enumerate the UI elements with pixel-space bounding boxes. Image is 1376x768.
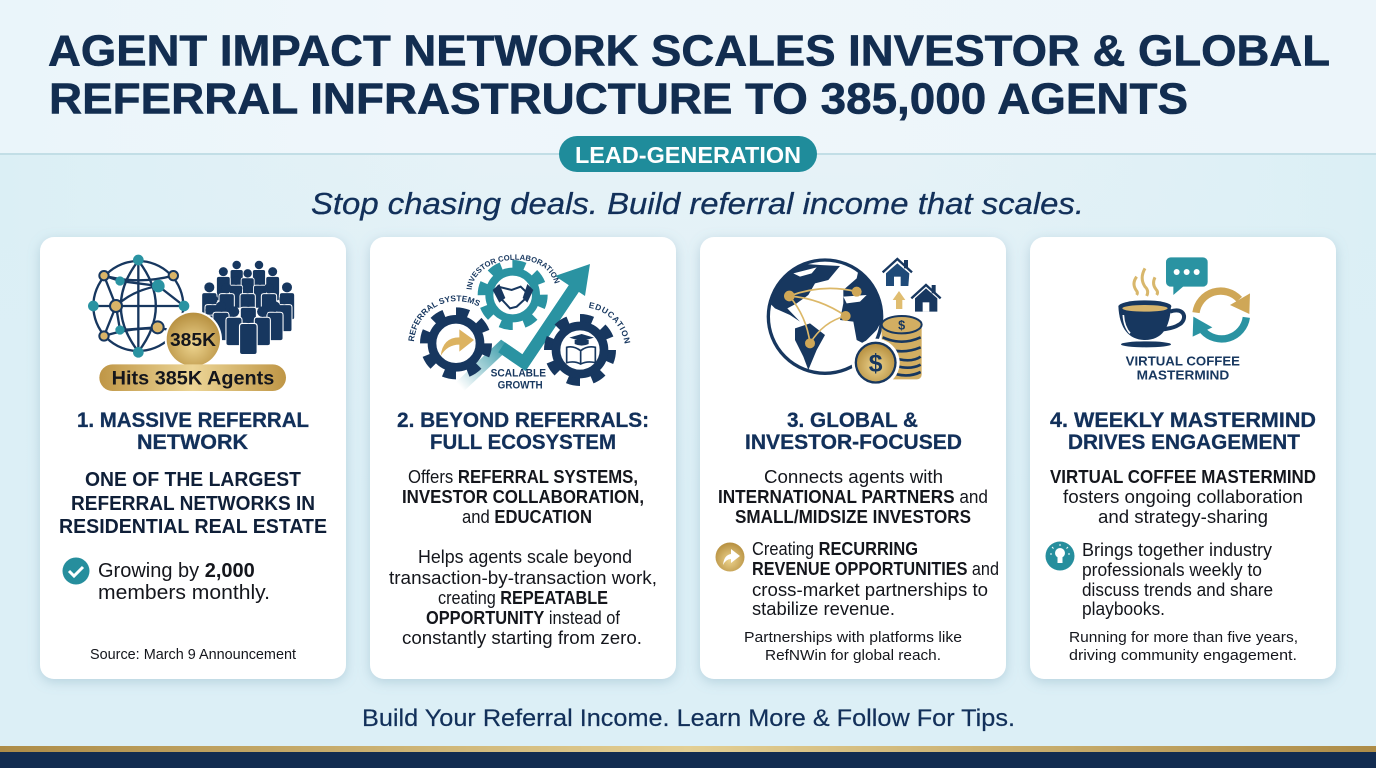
subheading: ONE OF THE LARGEST — [85, 468, 301, 491]
label: scalable growth: GROWTH — [498, 379, 543, 391]
icon: steam — [1134, 268, 1158, 296]
icon: crowd of people — [202, 261, 295, 355]
heading: INVESTOR-FOCUSED — [745, 430, 962, 454]
icon: gears and growth arrow — [408, 254, 630, 391]
label: virtual coffee mastermind: VIRTUAL COFFEE — [1126, 353, 1240, 368]
icon: navy gear with book — [548, 318, 612, 382]
note: Partnerships with platforms like — [744, 630, 962, 646]
summary text — [718, 466, 988, 527]
icon: teal gear — [482, 264, 543, 326]
bullet text: Growing by 2,000 — [98, 560, 255, 582]
note: Running for more than five years, — [1069, 630, 1298, 646]
label: scalable growth: SCALABLE — [491, 368, 546, 380]
heading — [397, 408, 649, 454]
icon: dollar coin: $ — [869, 350, 883, 377]
icon: cup — [1118, 300, 1184, 347]
bullet text: Brings together industry — [1082, 539, 1273, 560]
heading: 3. GLOBAL & — [787, 408, 918, 432]
bullet text: stabilize revenue. — [752, 598, 895, 619]
subheading: REFERRAL NETWORKS IN — [71, 492, 315, 515]
body text: constantly starting from zero. — [402, 627, 642, 648]
label: virtual coffee mastermind — [1126, 353, 1240, 382]
label: virtual coffee mastermind: MASTERMIND — [1137, 367, 1230, 382]
summary text: and EDUCATION — [462, 506, 592, 527]
badge: 385K: 385K — [170, 329, 217, 350]
icon: lightbulb — [1046, 542, 1074, 570]
arrow: growth — [460, 264, 590, 387]
title: REFERRAL INFRASTRUCTURE TO 385,000 AGENTS — [49, 74, 1188, 124]
footer bar — [0, 746, 1376, 768]
icon: navy gear with referral arrow — [424, 312, 488, 375]
summary text — [1050, 466, 1316, 527]
heading — [745, 408, 962, 454]
body text: Helps agents scale beyond — [418, 546, 632, 567]
bullet text: cross-market partnerships to — [752, 579, 988, 600]
heading: FULL ECOSYSTEM — [430, 430, 616, 454]
heading: 4. WEEKLY MASTERMIND — [1050, 408, 1316, 432]
heading: 2. BEYOND REFERRALS: — [397, 408, 649, 432]
body text — [389, 546, 657, 648]
subheading — [59, 468, 327, 538]
bullet text — [752, 538, 999, 619]
bullet text: playbooks. — [1082, 598, 1165, 619]
icon: coffee cup, chat and cycle — [1118, 257, 1250, 382]
icon: cycle arrows — [1193, 291, 1250, 339]
icon: check — [62, 558, 90, 584]
bullet text: REVENUE OPPORTUNITIES and — [752, 558, 999, 579]
note: driving community engagement. — [1069, 648, 1297, 664]
badge: lead-generation: LEAD-GENERATION — [575, 142, 801, 168]
title: AGENT IMPACT NETWORK SCALES INVESTOR & GLOBAL — [48, 26, 1330, 76]
footer call to action: Build Your Referral Income. Learn More & Follow For Tips. — [362, 705, 1015, 732]
summary text: INVESTOR COLLABORATION, — [402, 486, 644, 507]
panel: beyond referrals — [365, 235, 681, 686]
icon: coin stack: $ — [898, 318, 905, 332]
icon: coin stack — [882, 316, 922, 379]
heading: NETWORK — [137, 430, 248, 454]
summary text: SMALL/MIDSIZE INVESTORS — [735, 506, 971, 527]
label: investor collaboration: INVESTOR COLLABORATION — [466, 254, 560, 290]
background — [0, 155, 1376, 768]
label: scalable growth — [491, 368, 546, 391]
subheading: RESIDENTIAL REAL ESTATE — [59, 515, 327, 538]
summary text: VIRTUAL COFFEE MASTERMIND — [1050, 466, 1316, 487]
heading — [1050, 408, 1316, 454]
body text: OPPORTUNITY instead of — [426, 607, 621, 628]
header band — [0, 0, 1376, 154]
source: Source: March 9 Announcement — [90, 647, 296, 663]
summary text: INTERNATIONAL PARTNERS and — [718, 486, 988, 507]
summary text — [402, 466, 644, 527]
bullet text: members monthly. — [98, 582, 270, 604]
panel: weekly mastermind — [1030, 237, 1336, 679]
bullet text: discuss trends and share — [1082, 579, 1273, 600]
heading: 1. MASSIVE REFERRAL — [77, 408, 309, 432]
icon: globe, coins and houses — [768, 259, 941, 387]
pill: hits 385K agents: Hits 385K Agents — [112, 368, 274, 389]
icon: chat bubble — [1166, 257, 1208, 295]
icon: dollar coin — [852, 339, 900, 387]
tagline: Stop chasing deals. Build referral income that scales. — [311, 186, 1084, 221]
icon: gold arrow — [716, 542, 744, 572]
note: RefNWin for global reach. — [765, 648, 941, 664]
label: referral systems: REFERRAL SYSTEMS — [408, 295, 480, 342]
icon: houses — [883, 259, 941, 312]
note — [744, 630, 962, 664]
note — [1069, 630, 1298, 664]
badge: 385K — [165, 311, 222, 368]
summary text: and strategy-sharing — [1098, 506, 1268, 527]
bullet text: Creating RECURRING — [752, 538, 918, 559]
summary text: Offers REFERRAL SYSTEMS, — [408, 466, 638, 487]
body text: creating REPEATABLE — [438, 587, 608, 608]
summary text: fosters ongoing collaboration — [1063, 486, 1303, 507]
icon: globe — [768, 260, 887, 373]
icon: network globe and crowd — [88, 255, 295, 391]
title — [48, 26, 1330, 124]
heading: DRIVES ENGAGEMENT — [1068, 430, 1300, 454]
heading — [77, 408, 309, 454]
bullet text — [98, 560, 270, 604]
bullet text: professionals weekly to — [1082, 559, 1262, 580]
body text: transaction-by-transaction work, — [389, 567, 657, 588]
badge: lead-generation — [559, 136, 817, 172]
arrow: up — [893, 291, 905, 309]
label: education: EDUCATION — [588, 302, 630, 344]
pill: hits 385K agents — [99, 364, 286, 391]
bullet text — [1082, 539, 1273, 619]
panel: global and investor-focused — [700, 237, 1006, 679]
summary text: Connects agents with — [764, 466, 943, 487]
panel: massive referral network — [40, 237, 346, 679]
